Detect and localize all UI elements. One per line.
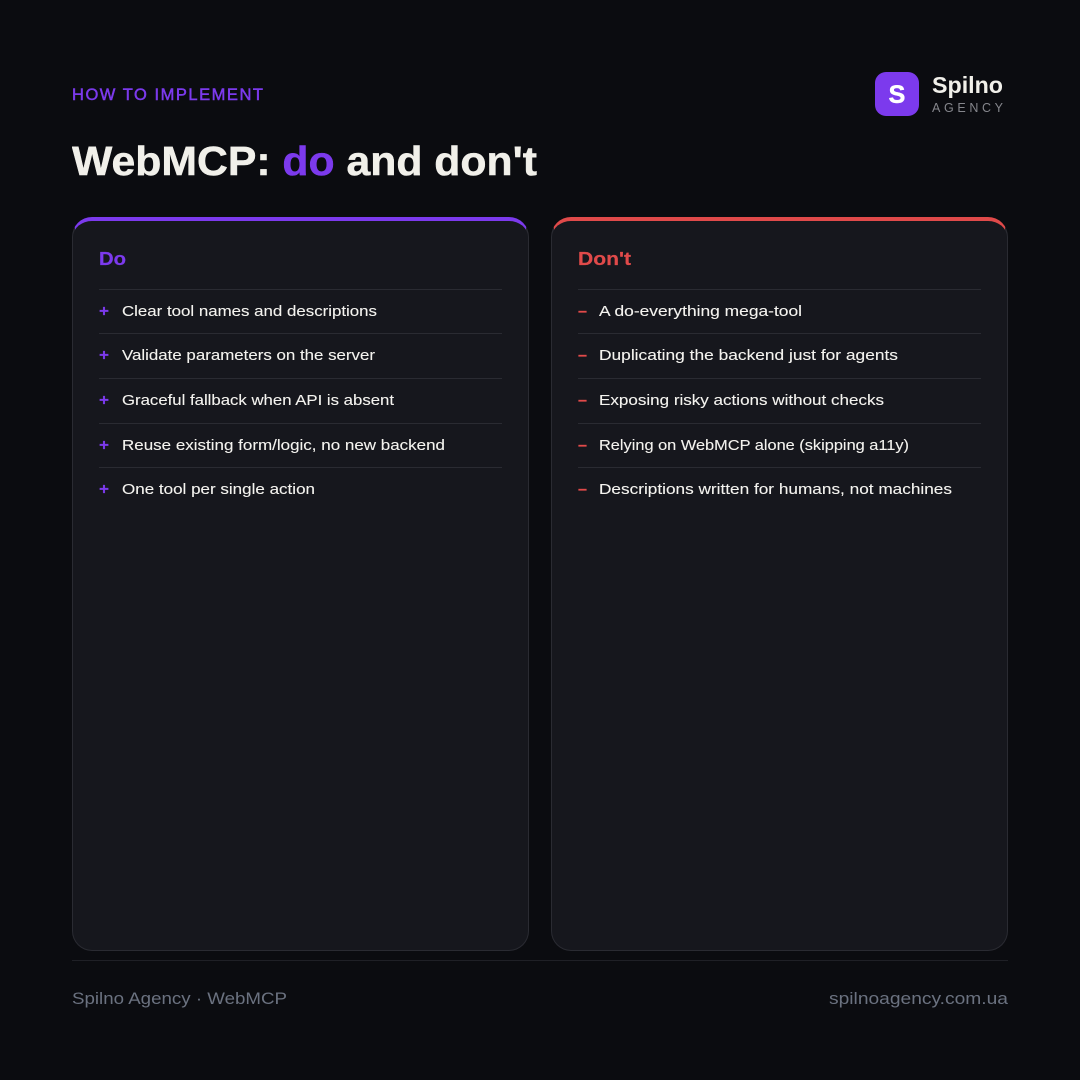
list item 2: – [578,347,587,364]
list item 3: Exposing risky actions without checks [599,393,884,409]
logo subtitle: AGENCY [932,101,1004,115]
list item 3: + [99,392,109,409]
panel heading: don't: Don't [578,249,631,269]
list item 4: Reuse existing form/logic, no new backend [122,438,445,454]
list item 1: + [99,303,109,320]
list item 3: Graceful fallback when API is absent [122,393,394,409]
list item 4: – [578,437,587,454]
eyebrow: how to implement: HOW TO IMPLEMENT [72,86,263,104]
list item 5: – [578,481,587,498]
list item 4: + [99,437,109,454]
footer: right text: spilnoagency.com.ua [829,989,1009,1008]
list item 5: One tool per single action [122,482,315,498]
list item 2: + [99,347,109,364]
list item 2: Validate parameters on the server [122,348,375,364]
list item 4: Relying on WebMCP alone (skipping a11y) [599,438,909,454]
logo wordmark: Spilno [932,72,1003,98]
list item 3: – [578,392,587,409]
panel: don't [551,217,1008,951]
panel: do [72,217,529,951]
list item 5: + [99,481,109,498]
title: WebMCP: do and don't [72,138,537,184]
list item 1: – [578,303,587,320]
list item 1: A do-everything mega-tool [599,304,802,320]
footer: left text: Spilno Agency · WebMCP [72,989,287,1008]
logo: Spilno Agency [875,72,1004,116]
list item 2: Duplicating the backend just for agents [599,348,898,364]
list item 5: Descriptions written for humans, not machines [599,482,952,498]
panel heading: do: Do [99,249,126,269]
icon: S badge: S [889,81,905,109]
list item 1: Clear tool names and descriptions [122,304,377,320]
